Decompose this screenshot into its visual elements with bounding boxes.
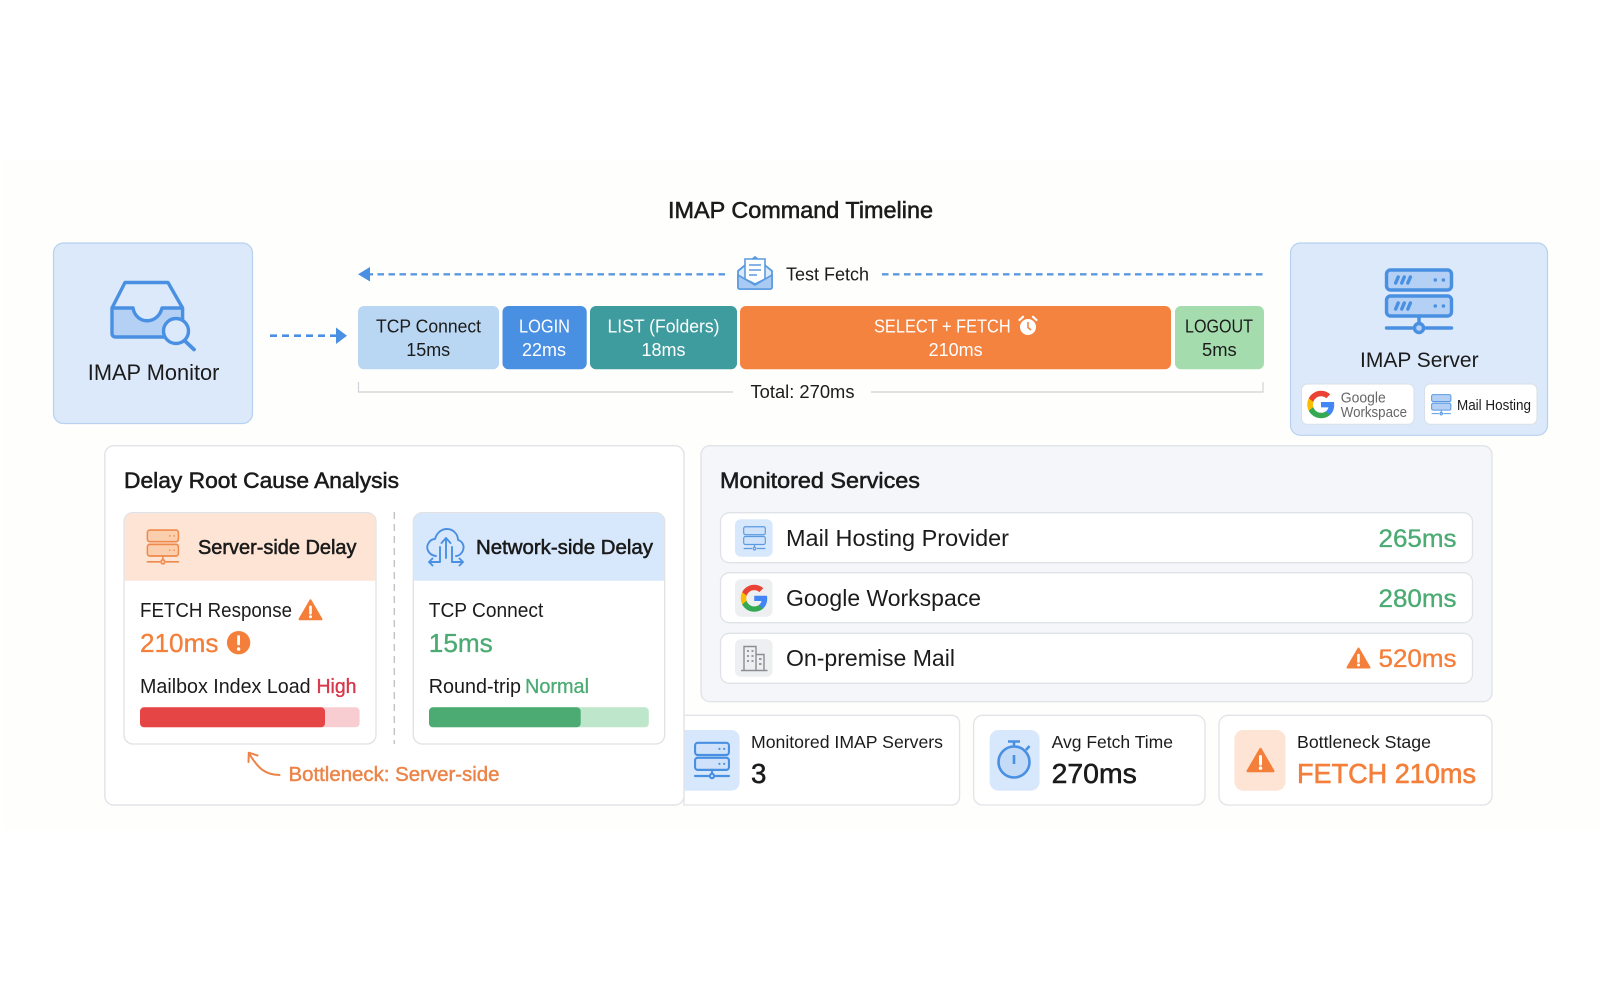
icon: alert circle [227,631,250,654]
row: Google Workspace: Google Workspace [786,585,981,611]
segment: LOGOUT: 5ms [1202,339,1237,360]
segment: SELECT + FETCH: 210ms [929,339,983,360]
load label: Mailbox Index Load [140,675,311,698]
callout: bottleneck [248,753,500,786]
segment: LIST: 18ms [642,339,686,360]
value: 270ms [1052,758,1137,789]
segment: LOGIN: 22ms [522,339,566,360]
metric label: TCP Connect [429,599,544,622]
panel: stat card bottleneck stage [1219,715,1492,805]
icon: server tile [684,730,740,791]
row: On-premise Mail: On-premise Mail [786,645,955,671]
panel: IMAP Monitor [54,243,252,424]
arrow: monitor to timeline [270,328,347,344]
metric value: 15ms [429,628,493,658]
icon: alarm clock [1020,317,1036,335]
chip: Mail Hosting [1424,384,1537,424]
segment: LOGIN [502,306,587,369]
progress bar: round-trip [429,707,649,727]
panel: Monitored Services [701,446,1492,702]
callout: bottleneck: Bottleneck: Server-side [288,764,500,786]
row: On-premise Mail [720,633,1472,683]
icon: inbox with magnifier [112,282,194,350]
bracket: total duration: Total: 270ms [750,382,854,402]
round-trip label: Normal [525,675,589,698]
title: IMAP Command Timeline [668,197,933,223]
heading: Delay Root Cause Analysis [124,468,399,493]
segment: SELECT + FETCH: SELECT + FETCH [874,316,1011,336]
segment: LOGOUT: LOGOUT [1185,316,1253,336]
icon: warning [1348,648,1370,668]
segment: LIST [590,306,737,369]
card: server-side delay [124,513,376,744]
progress bar: load [140,707,360,727]
row: On-premise Mail: 520ms [1378,645,1456,673]
value: 3 [751,758,766,789]
metric label: FETCH Response [140,599,292,622]
metric value: 210ms [140,628,218,658]
round-trip label [429,675,589,698]
panel: stat card monitored servers [684,715,960,805]
segment: TCP Connect: 15ms [406,339,450,360]
icon: building [741,646,768,670]
icon: warning [300,600,322,619]
icon: cloud network [427,529,464,566]
load label: High [316,675,356,698]
icon: server rack [1387,270,1451,332]
label: Test Fetch: Test Fetch [786,264,869,284]
icon: warning tile [1234,730,1286,791]
segment: TCP Connect [358,306,499,369]
value: FETCH 210ms [1297,758,1476,789]
round-trip label: Round-trip [429,675,521,698]
icon: orange server [147,530,178,564]
heading: Monitored Services [720,468,920,493]
icon: test fetch envelope [738,257,772,289]
label: Monitored IMAP Servers [751,732,943,752]
row: Mail Hosting Provider: 265ms [1378,525,1456,553]
heading: Network-side Delay [476,537,653,559]
chart: command timeline bar [358,306,1264,369]
label: Avg Fetch Time [1052,732,1173,752]
icon: stopwatch tile [990,730,1040,791]
label: IMAP Monitor: IMAP Monitor [88,360,219,385]
label: Bottleneck Stage [1297,732,1431,752]
bracket: total duration [358,382,1263,402]
row: Mail Hosting Provider: Mail Hosting Provider [786,525,1009,551]
row: Google Workspace: 280ms [1378,585,1456,613]
label: IMAP Server: IMAP Server [1360,349,1479,372]
segment: LIST: LIST (Folders) [608,316,720,336]
chip: Google Workspace: Google [1341,390,1386,406]
chip: Google Workspace [1302,384,1414,424]
divider [393,512,395,744]
chip: Google Workspace: Workspace [1341,404,1407,421]
panel: Delay Root Cause Analysis [105,446,684,805]
card: network-side delay [413,513,665,744]
chip: Mail Hosting: Mail Hosting [1457,398,1531,414]
panel: stat card avg fetch time [974,715,1205,805]
segment: LOGOUT [1175,306,1264,369]
heading: Server-side Delay [198,537,356,559]
row: Mail Hosting Provider [720,513,1472,563]
panel: IMAP Server [1290,243,1548,435]
arrow: test fetch return line [358,267,1263,282]
segment: LOGIN: LOGIN [519,316,570,336]
segment: TCP Connect: TCP Connect [376,316,481,336]
segment: SELECT + FETCH [740,306,1171,369]
row: Google Workspace [720,573,1472,623]
